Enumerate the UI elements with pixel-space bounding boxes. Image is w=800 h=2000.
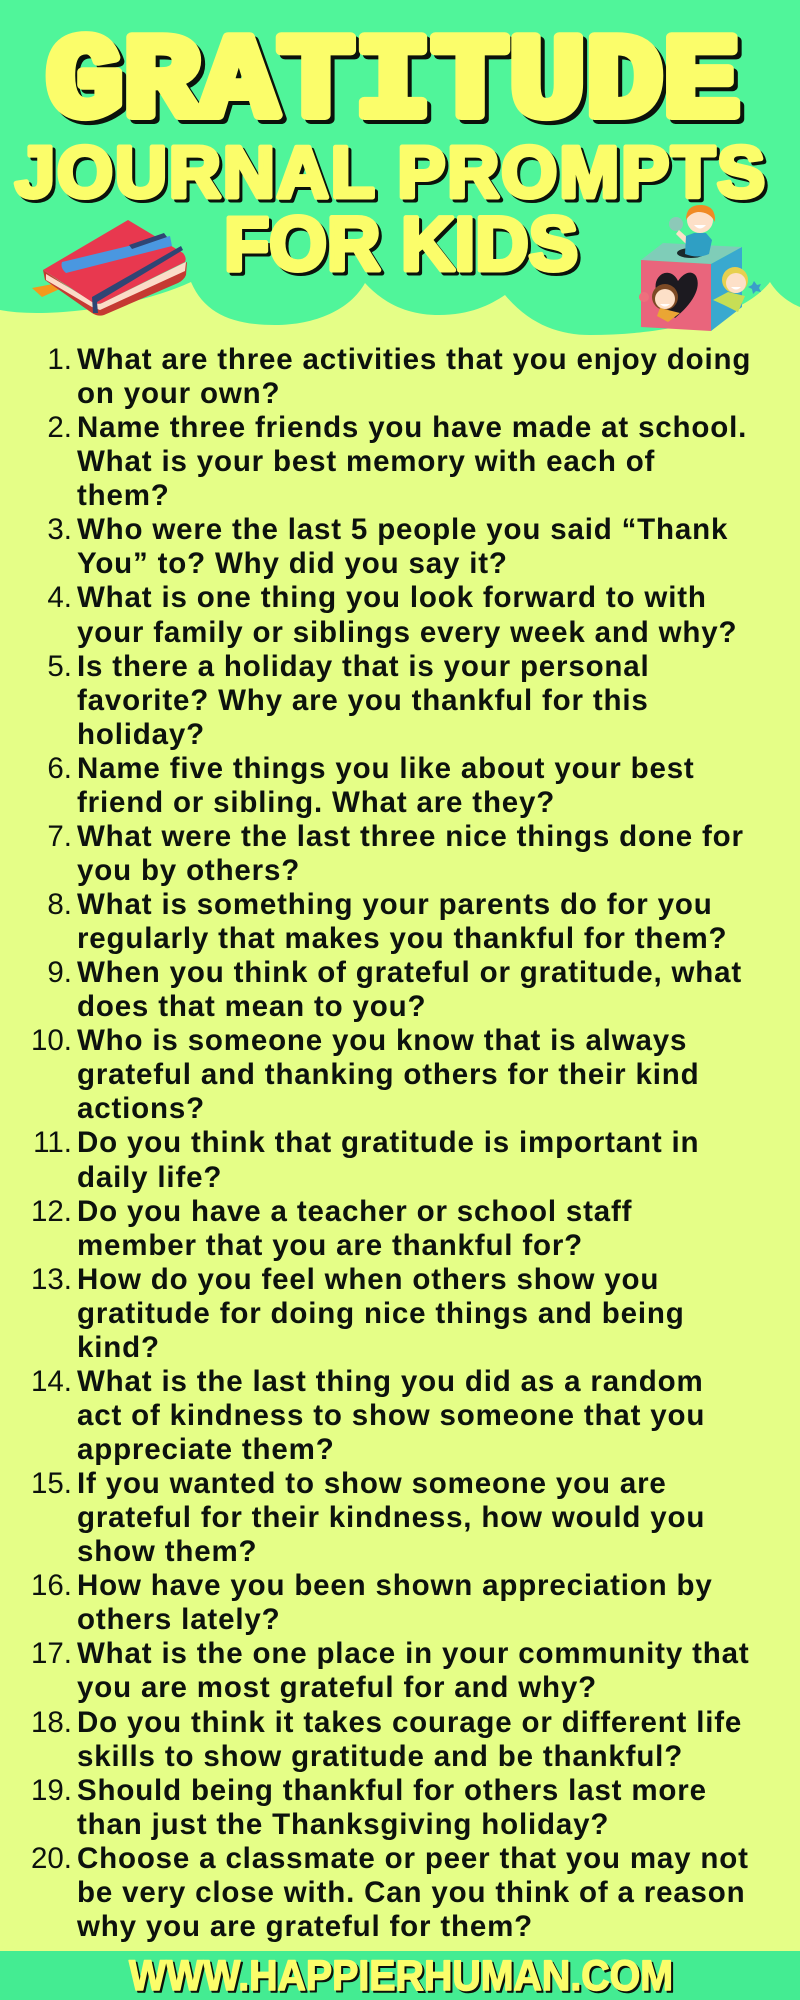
prompt 12: member that you are thankful for? [77,1229,583,1262]
prompt 19: than just the Thanksgiving holiday? [77,1808,609,1841]
prompt 5: holiday? [77,718,205,751]
prompt 13 [31,1263,685,1364]
prompt 16: How have you been shown appreciation by [77,1569,713,1602]
prompt 12: Do you have a teacher or school staff [77,1195,632,1228]
prompt 10: 10. [31,1024,72,1057]
prompt 7: 7. [47,820,72,853]
prompt 16: 16. [31,1569,72,1602]
prompt 7: you by others? [77,854,300,887]
prompt 4: 4. [47,581,72,614]
prompt 11: 11. [33,1126,72,1159]
prompt 9: 9. [47,956,72,989]
prompt 8: What is something your parents do for you [77,888,713,921]
prompt 20: be very close with. Can you think of a reason [77,1876,746,1909]
prompt 14 [31,1365,705,1466]
prompt 18: skills to show gratitude and be thankful? [77,1740,683,1773]
prompt 2: them? [77,479,170,512]
prompt 10: grateful and thanking others for their kind [77,1058,699,1091]
prompt 6: friend or sibling. What are they? [77,786,555,819]
prompt 11 [33,1126,699,1194]
title: FOR KIDS: FOR KIDS [224,202,578,287]
prompt 3 [47,513,728,580]
prompt 14: act of kindness to show someone that you [77,1399,705,1432]
prompt 9 [47,956,742,1023]
prompt 13: 13. [31,1263,72,1296]
prompt 15 [31,1467,705,1568]
heart window with girl [639,273,698,322]
prompt 1: on your own? [77,377,280,410]
prompt 17: 17. [31,1637,72,1670]
prompt 20: Choose a classmate or peer that you may not [77,1842,749,1875]
prompt 4: your family or siblings every week and why? [77,616,737,648]
prompt 20: 20. [31,1842,72,1875]
prompt 9: does that mean to you? [77,990,426,1023]
prompt 3: 3. [47,513,72,546]
prompt 5: favorite? Why are you thankful for this [77,684,649,717]
prompt 8: regularly that makes you thankful for them? [77,922,727,955]
green scalloped background [0,0,800,335]
prompt 6 [47,752,695,819]
prompt 5: 5. [47,650,72,683]
prompt 17: What is the one place in your community that [77,1637,749,1670]
prompt 10: actions? [77,1092,205,1125]
prompt 14: appreciate them? [77,1433,335,1466]
prompt 1 [47,343,751,410]
prompt 12 [31,1195,632,1262]
title: GRATITUDE: GRATITUDE [46,18,740,151]
prompt 2: Name three friends you have made at school. [77,411,747,444]
prompt 12: 12. [31,1195,72,1228]
prompt 7 [47,820,744,887]
prompt 16: others lately? [77,1603,280,1636]
prompt 7: What were the last three nice things done for [77,820,744,853]
prompt 20 [31,1842,749,1943]
prompt 16 [31,1569,713,1636]
prompt 15: show them? [77,1535,257,1568]
prompt 9: When you think of grateful or gratitude, what [77,956,742,989]
prompt 17: you are most grateful for and why? [77,1671,597,1704]
prompt 10 [31,1024,699,1125]
prompt 20: why you are grateful for them? [77,1910,533,1943]
prompt 2: 2. [47,411,72,444]
prompt 17 [31,1637,749,1704]
prompt 4 [47,581,737,648]
prompt 15: grateful for their kindness, how would you [77,1501,705,1534]
prompt 1: 1. [47,343,72,376]
prompt 2: What is your best memory with each of [77,445,655,478]
prompt 14: 14. [31,1365,72,1398]
prompt 14: What is the last thing you did as a random [77,1365,704,1398]
boy on top [669,205,715,244]
prompt 19: 19. [31,1774,72,1807]
prompt 6: Name five things you like about your best [77,752,695,785]
prompt 11: daily life? [77,1160,222,1194]
prompt 15: If you wanted to show someone you are [77,1467,667,1500]
prompt 15: 15. [31,1467,72,1500]
prompt 13: gratitude for doing nice things and being [77,1297,685,1330]
prompt 2 [47,411,747,512]
footer bar [0,1951,800,2000]
prompt 13: How do you feel when others show you [77,1263,659,1296]
prompt 18 [31,1706,742,1773]
title: JOURNAL PROMPTS: JOURNAL PROMPTS [15,133,767,213]
prompt 4: What is one thing you look forward to with [77,581,707,614]
prompt 8: 8. [47,888,72,921]
prompt 5 [47,650,650,751]
prompt 18: 18. [31,1706,72,1738]
prompt 8 [47,888,727,955]
prompt 5: Is there a holiday that is your personal [77,650,650,683]
prompt 19 [31,1774,707,1841]
prompt 3: Who were the last 5 people you said “Thank [77,513,728,546]
prompt 19: Should being thankful for others last more [77,1774,707,1807]
boy's shirt [685,233,712,256]
prompt 11: Do you think that gratitude is important in [77,1126,699,1159]
header banner [0,0,800,335]
prompt 3: You” to? Why did you say it? [77,547,508,580]
footer website url: WWW.HAPPIERHUMAN.COM [129,1952,673,2000]
prompt 6: 6. [47,752,72,785]
icon: red journal with pen [32,220,187,316]
prompt 18: Do you think it takes courage or different life [77,1706,742,1738]
prompt 10: Who is someone you know that is always [77,1024,687,1057]
blonde boy with star [713,267,761,312]
prompt 13: kind? [77,1331,160,1364]
prompt 1: What are three activities that you enjoy doing [77,343,751,376]
icon: kids playing in a toy cube [639,205,761,331]
